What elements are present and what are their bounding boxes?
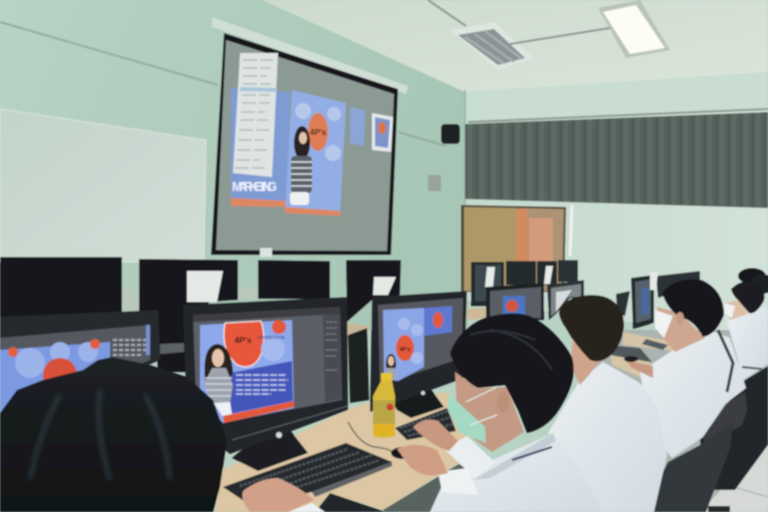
keyboard second [395,408,456,440]
keyboard main [223,443,392,505]
screen housing [212,17,408,94]
far row monitors [467,260,578,320]
lower room backdrop [580,330,768,512]
hands [397,445,448,475]
second monitor stand [392,388,444,418]
floor [700,440,768,512]
wall ledge [468,72,768,122]
ceiling [262,0,768,92]
monitor screen [193,307,342,422]
projector screen [211,17,408,257]
main monitor [183,297,348,454]
office chairs [643,366,768,512]
right tool panel [323,314,342,402]
hair [559,295,624,361]
foreground hand and cuff [242,478,325,512]
sleeves [444,436,495,478]
wall: left [0,0,468,330]
thumbnails [350,107,393,152]
mouse [391,447,415,459]
face and neck [455,372,524,452]
poster page left [231,88,290,207]
cable [348,422,392,452]
right side monitors [616,271,700,329]
orange 4P's circle: 4P's [234,335,252,345]
right desk [623,332,674,351]
monitor body [183,297,348,454]
neck [570,338,601,385]
arm [625,360,653,378]
student fourth [724,281,768,381]
face [657,307,705,352]
monitor with white document [547,280,584,320]
wall speaker [441,124,460,144]
poster person [290,126,312,205]
chair between monitors [348,328,369,403]
hair [662,279,724,337]
HP logo [276,432,282,438]
woman on screen [204,344,233,416]
monitor with blue poster [486,283,544,320]
poster on screen [200,320,294,423]
hair [450,313,574,433]
student two [548,295,667,512]
back row monitors [0,257,401,372]
projected software window [216,40,394,251]
door [461,205,566,292]
student far right [728,268,768,330]
shirt [430,433,603,512]
back students [724,268,768,381]
ear [676,312,684,324]
program menu [233,53,278,177]
screen frame [211,33,398,255]
desk [215,392,472,512]
whiteboard [0,109,206,262]
poster page centre [285,90,346,216]
poster page left: MARKETING [232,180,277,194]
foreground head [0,357,227,512]
bag strap [718,330,733,392]
ear [497,391,509,413]
window blinds [465,109,768,208]
chin line [232,406,348,440]
ceiling vent [450,22,534,70]
second monitor [370,291,467,412]
main monitor stand [232,430,308,471]
face mask [448,393,486,443]
second monitor: 4P's [399,347,411,353]
white mask [655,310,673,338]
shirt [548,362,667,512]
left background monitor [0,310,160,430]
student three [624,279,746,458]
bottle [373,373,395,438]
ceiling light [598,0,670,58]
wall socket [428,175,441,191]
shirt [640,329,746,458]
poster on screen: PROMOTION [257,335,285,340]
poster page centre: 4P's [310,128,327,137]
wall: right [465,70,768,340]
front student [397,313,603,512]
woman on second screen [386,354,396,380]
